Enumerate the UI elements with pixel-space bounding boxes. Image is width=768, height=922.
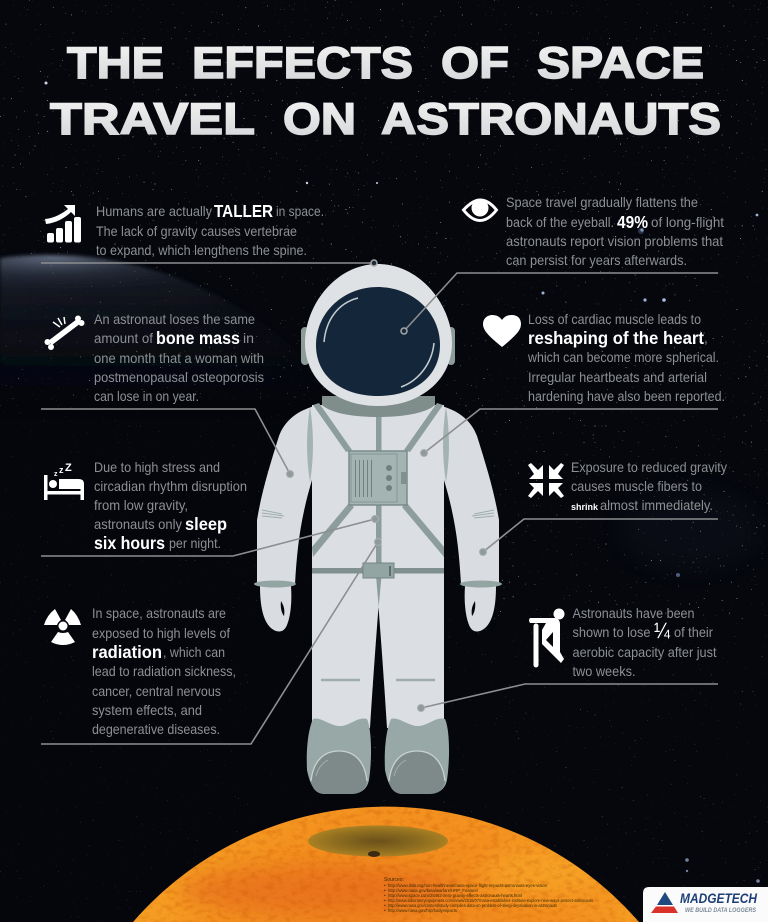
text: vision: of long-flight bbox=[651, 215, 724, 230]
sources: http://www.nasa.gov/hrp/bodyimpacts bbox=[388, 908, 458, 913]
helmet bbox=[301, 264, 455, 406]
text: muscle: shrink bbox=[571, 502, 599, 513]
text: taller: TALLER bbox=[214, 201, 273, 221]
icon: person sleeping in bed: z bbox=[59, 465, 64, 475]
text: radiation: In space, astronauts are bbox=[92, 606, 226, 621]
text: bone mass: bone mass bbox=[156, 328, 240, 348]
leader line: forearm bbox=[480, 519, 718, 556]
panel: sleep bbox=[41, 460, 378, 556]
title: TRAVEL bbox=[50, 95, 255, 144]
text: taller: to expand, which lengthens the spine. bbox=[96, 243, 307, 258]
title: SPACE bbox=[537, 39, 704, 88]
text: taller bbox=[96, 201, 324, 258]
text: bone mass: in bbox=[243, 331, 254, 346]
text: muscle: Exposure to reduced gravity bbox=[571, 460, 727, 475]
leader line: torso bbox=[41, 516, 378, 556]
text: heart: Irregular heartbeats and arterial bbox=[528, 370, 707, 385]
panel: heart bbox=[420, 312, 725, 456]
sources: • bbox=[384, 888, 386, 893]
text: heart: , bbox=[704, 331, 708, 346]
suit straps and stripes bbox=[307, 403, 449, 607]
leader line: thigh bbox=[418, 684, 718, 712]
text: muscle: causes muscle fibers to bbox=[571, 479, 702, 494]
text: vision bbox=[506, 195, 724, 268]
text: vision: Space travel gradually flattens the bbox=[506, 195, 698, 210]
text: aerobic capacity: Astronauts have been bbox=[572, 606, 694, 621]
icon: heart bbox=[483, 315, 521, 347]
right boot bbox=[385, 718, 449, 794]
text: bone mass bbox=[94, 312, 264, 404]
text: vision: back of the eyeball. bbox=[506, 215, 614, 230]
suit torso and legs bbox=[312, 405, 444, 728]
text: bone mass: can lose in on year. bbox=[94, 389, 199, 404]
text: muscle bbox=[571, 460, 727, 513]
text: sleep: from low gravity, bbox=[94, 498, 188, 513]
text: radiation: degenerative diseases. bbox=[92, 722, 220, 737]
visor bbox=[316, 287, 440, 396]
leader line: top of helmet bbox=[41, 260, 377, 266]
icon: eye bbox=[464, 200, 496, 220]
leader line: abdomen bbox=[41, 538, 382, 744]
panel: aerobic capacity bbox=[418, 606, 718, 712]
text: sleep: per night. bbox=[169, 536, 221, 551]
text: radiation: system effects, and bbox=[92, 703, 202, 718]
text: radiation: lead to radiation sickness, bbox=[92, 664, 236, 679]
text: radiation: radiation bbox=[92, 642, 162, 662]
text: aerobic capacity: aerobic capacity after just bbox=[572, 645, 717, 660]
sources: http://www.nasa.gov/beta/warfare/HRP_Feature/ bbox=[388, 888, 479, 893]
sources: • bbox=[384, 898, 386, 903]
text: bone mass: postmenopausal osteoporosis bbox=[94, 370, 264, 385]
text: sleep: six hours bbox=[94, 533, 165, 553]
logo: MadgeTech bbox=[643, 887, 768, 922]
logo: MadgeTech: WE BUILD DATA LOGGERS bbox=[685, 908, 756, 914]
text: aerobic capacity: ¼ bbox=[654, 618, 671, 643]
title bbox=[50, 39, 721, 144]
earth horizon glow bbox=[0, 252, 292, 399]
icon: radiation symbol bbox=[44, 609, 81, 645]
planet mars bbox=[133, 806, 639, 922]
leader line: chest bbox=[420, 409, 718, 456]
text: aerobic capacity: shown to lose bbox=[572, 625, 650, 640]
title: ASTRONAUTS bbox=[381, 95, 721, 144]
text: radiation bbox=[92, 606, 236, 737]
panel: vision bbox=[401, 195, 724, 334]
text: heart: which can become more spherical. bbox=[527, 350, 719, 365]
icon: person sleeping in bed: Z bbox=[65, 462, 72, 474]
sources: http://www.nasa.gov/content/study-compiles-data-on-problem-of-sleep-deprivation-in-astronauts bbox=[388, 903, 558, 908]
text: sleep: astronauts only bbox=[94, 517, 182, 532]
text: heart: hardening have also been reported. bbox=[528, 389, 725, 404]
text: vision: astronauts report vision problems that bbox=[506, 234, 723, 249]
panel: taller in space bbox=[41, 201, 377, 266]
text: radiation: cancer, central nervous bbox=[92, 684, 221, 699]
title: EFFECTS bbox=[192, 39, 413, 88]
leader line: visor bbox=[401, 273, 718, 334]
text: aerobic capacity: two weeks. bbox=[572, 664, 636, 679]
sources: • bbox=[384, 908, 386, 913]
title: THE bbox=[67, 39, 164, 88]
text: sleep: Due to high stress and bbox=[94, 460, 220, 475]
text: taller: in space. bbox=[276, 204, 324, 219]
text: heart: Loss of cardiac muscle leads to bbox=[528, 312, 701, 327]
text: radiation: exposed to high levels of bbox=[92, 626, 230, 641]
text: heart: reshaping of the heart bbox=[528, 328, 704, 348]
sources: http://www.dsls.org/non-healthnews/nasa-space-flight-impacts-astronauts-eyes-vision bbox=[388, 883, 547, 888]
logo: MadgeTech: MADGETECH bbox=[680, 890, 758, 906]
icon: rising bar chart bbox=[45, 205, 81, 242]
chest control box bbox=[349, 451, 407, 505]
text: radiation: , which can bbox=[163, 645, 225, 660]
sources: • bbox=[384, 903, 386, 908]
icon: inward arrows bbox=[528, 463, 564, 498]
suit arms bbox=[257, 405, 499, 584]
text: taller: The lack of gravity causes vertebrae bbox=[96, 224, 297, 239]
panel: muscle bbox=[480, 460, 727, 556]
text: sleep: circadian rhythm disruption bbox=[94, 479, 247, 494]
text: sleep bbox=[94, 460, 247, 553]
suit wrinkles bbox=[262, 510, 494, 680]
sources: • bbox=[384, 883, 386, 888]
sources: http://www.laboratoryequipment.com/news/2016/07/nasa-establishes-institute-explore-new-ways-protect-astronauts bbox=[388, 898, 594, 903]
icon: person sleeping in bed bbox=[44, 462, 84, 500]
text: bone mass: An astronaut loses the same bbox=[94, 312, 255, 327]
text: taller: Humans are actually bbox=[96, 204, 212, 219]
text: heart bbox=[527, 312, 725, 404]
icon: person climbing stairs bbox=[529, 608, 564, 665]
text: vision: can persist for years afterwards. bbox=[506, 253, 687, 268]
text: aerobic capacity bbox=[572, 606, 717, 679]
sources: Sources: bbox=[384, 877, 404, 883]
text: muscle: almost immediately. bbox=[600, 498, 713, 513]
text: bone mass: amount of bbox=[94, 331, 153, 346]
arm cuffs and hands bbox=[254, 580, 502, 631]
panel: bone mass bbox=[41, 312, 294, 478]
astronaut figure bbox=[254, 264, 502, 794]
text: bone mass: one month that a woman with bbox=[94, 351, 264, 366]
leader line: arm bbox=[41, 409, 294, 478]
left boot bbox=[307, 718, 371, 794]
title: OF bbox=[441, 39, 509, 88]
text: sleep: sleep bbox=[185, 514, 227, 534]
text: vision: 49% bbox=[617, 212, 648, 232]
sources: http://www.space.com/25482-zero-gravity-effects-astronauts-hearts.html bbox=[388, 893, 522, 898]
text: aerobic capacity: of their bbox=[674, 625, 713, 640]
icon: person sleeping in bed: z bbox=[54, 471, 58, 478]
sources bbox=[384, 877, 594, 913]
icon: broken bone bbox=[44, 316, 84, 350]
title: ON bbox=[283, 95, 356, 144]
sources: • bbox=[384, 893, 386, 898]
panel: radiation bbox=[41, 538, 382, 744]
neck collar bbox=[322, 396, 435, 417]
